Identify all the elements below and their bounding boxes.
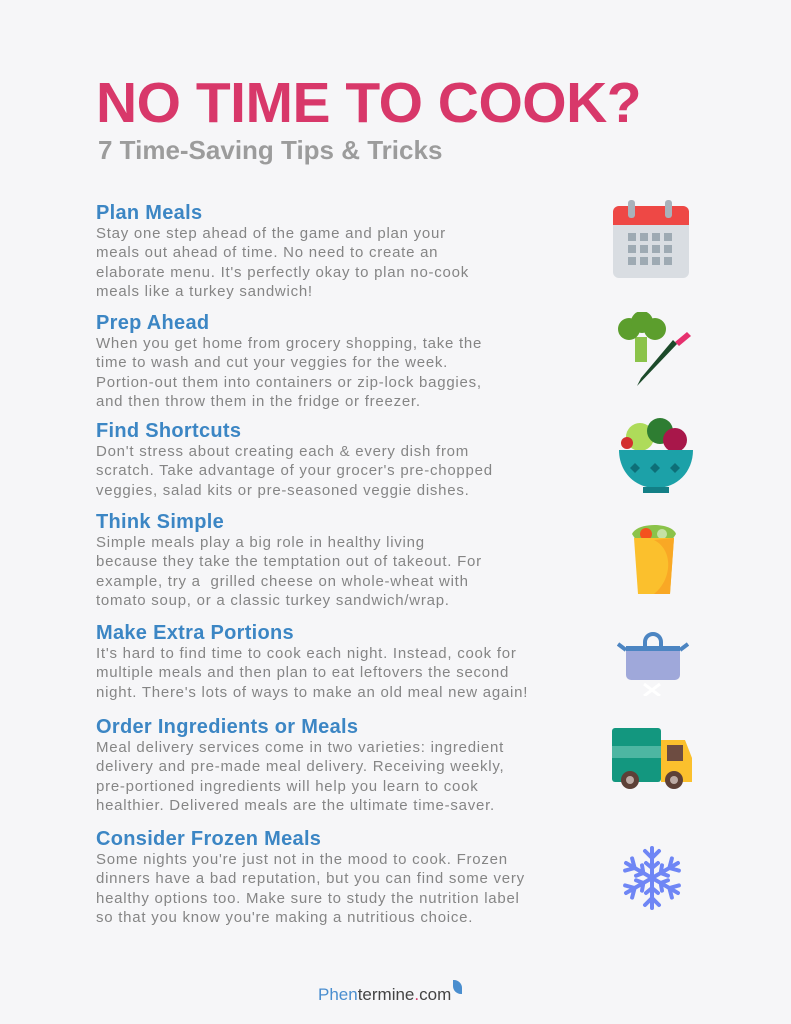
tip: think simple: Simple meals play a big role in healthy living (96, 534, 425, 551)
tip: plan meals: meals out ahead of time. No need to create an (96, 244, 438, 261)
icon: truck (612, 728, 692, 789)
tip: make extra portions: night. There's lots of ways to make an old meal new again! (96, 684, 528, 701)
tip: make extra portions: multiple meals and then plan to eat leftovers the second (96, 664, 509, 681)
tip: think simple (96, 511, 482, 609)
tip: make extra portions: Make Extra Portions (96, 622, 294, 644)
icon: snowflake (623, 846, 681, 910)
tip: frozen meals: healthy options too. Make sure to study the nutrition label (96, 890, 520, 907)
tip: find shortcuts: Don't stress about creating each & every dish from (96, 443, 469, 460)
tip: frozen meals: Some nights you're just not in the mood to cook. Frozen (96, 851, 508, 868)
tip: order ingredients: healthier. Delivered meals are the ultimate time-saver. (96, 797, 495, 814)
tip: find shortcuts: veggies, salad kits or pre-seasoned veggie dishes. (96, 482, 470, 499)
tip: plan meals: meals like a turkey sandwich! (96, 283, 313, 300)
tip: think simple: Think Simple (96, 511, 224, 533)
subtitle: 7 Time-Saving Tips & Tricks (98, 135, 442, 165)
tip: prep ahead: When you get home from grocery shopping, take the (96, 335, 482, 352)
tip: make extra portions: It's hard to find time to cook each night. Instead, cook for (96, 645, 517, 662)
icon: calendar (613, 200, 689, 278)
tip: prep ahead (96, 312, 482, 410)
tip: frozen meals (96, 828, 525, 926)
tip: make extra portions (96, 622, 528, 701)
tip: order ingredients: pre-portioned ingredients will help you learn to cook (96, 778, 478, 795)
title: NO TIME TO COOK? (96, 71, 641, 135)
tip: find shortcuts: scratch. Take advantage of your grocer's pre-chopped (96, 462, 493, 479)
tip: order ingredients: Order Ingredients or Meals (96, 716, 358, 738)
tip: frozen meals: dinners have a bad reputation, but you can find some very (96, 870, 525, 887)
icon: pot (617, 632, 689, 696)
tip: prep ahead: Portion-out them into containers or zip-lock baggies, (96, 374, 482, 391)
tip: prep ahead: and then throw them in the fridge or freezer. (96, 393, 421, 410)
icon: wrap (632, 525, 676, 594)
icon: salad bowl (619, 418, 693, 493)
tip: plan meals (96, 202, 469, 300)
tip: find shortcuts: Find Shortcuts (96, 420, 241, 442)
logo: Phentermine.com (318, 985, 451, 1004)
tip: find shortcuts (96, 420, 493, 499)
tip: order ingredients: Meal delivery services come in two varieties: ingredient (96, 739, 504, 756)
icon: broccoli and knife (618, 312, 691, 386)
tip: order ingredients: delivery and pre-made meal delivery. Receiving weekly, (96, 758, 504, 775)
tip: order ingredients (96, 716, 504, 814)
tip: prep ahead: time to wash and cut your veggies for the week. (96, 354, 448, 371)
tip: frozen meals: Consider Frozen Meals (96, 828, 321, 850)
tip: prep ahead: Prep Ahead (96, 312, 209, 334)
tip: frozen meals: so that you know you're making a nutritious choice. (96, 909, 473, 926)
tip: think simple: because they take the temptation out of takeout. For (96, 553, 482, 570)
tip: think simple: tomato soup, or a classic turkey sandwich/wrap. (96, 592, 450, 609)
tip: plan meals: Plan Meals (96, 202, 202, 224)
tip: plan meals: Stay one step ahead of the game and plan your (96, 225, 446, 242)
tip: think simple: example, try a grilled cheese on whole-wheat with (96, 573, 469, 590)
tip: plan meals: elaborate menu. It's perfectly okay to plan no-cook (96, 264, 469, 281)
